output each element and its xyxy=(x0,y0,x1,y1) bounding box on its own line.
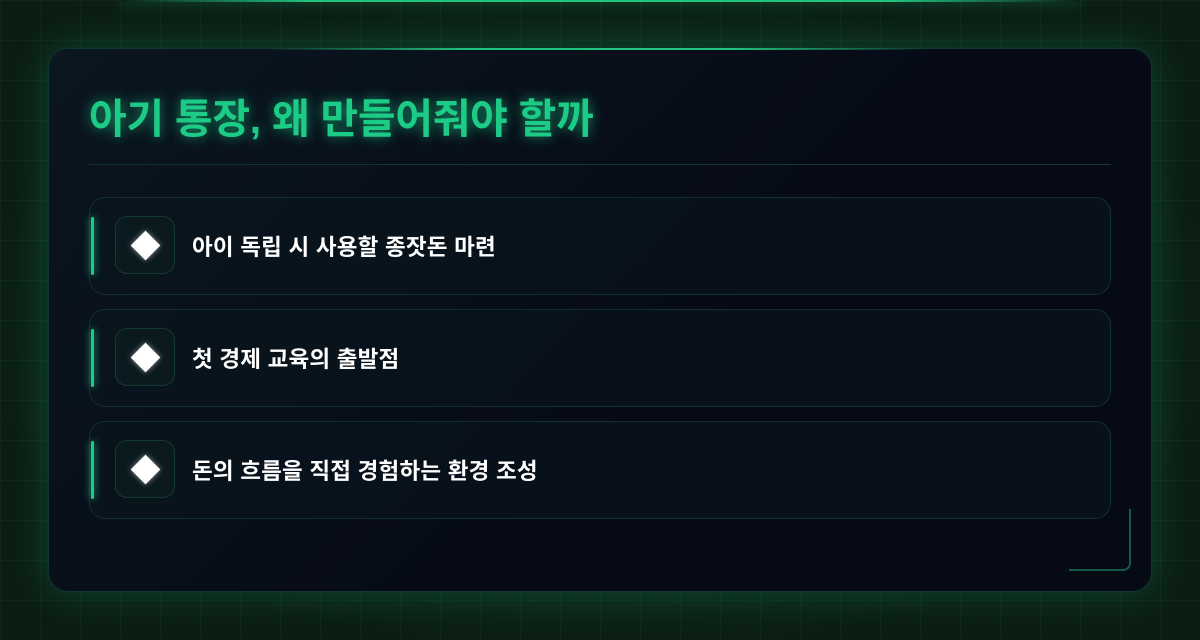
item 2 xyxy=(89,309,1111,407)
title: 아기 통장, 왜 만들어줘야 할까 xyxy=(89,96,594,142)
text 3: 돈의 흐름을 직접 경험하는 환경 조성 xyxy=(192,459,538,484)
panel: main card xyxy=(48,48,1152,592)
item 1 xyxy=(89,197,1111,295)
text 2: 첫 경제 교육의 출발점 xyxy=(192,347,399,372)
icon: diamond xyxy=(115,216,175,274)
item 3 xyxy=(89,421,1111,519)
text 1: 아이 독립 시 사용할 종잣돈 마련 xyxy=(192,235,496,260)
icon: diamond xyxy=(115,328,175,386)
icon: diamond xyxy=(115,440,175,498)
